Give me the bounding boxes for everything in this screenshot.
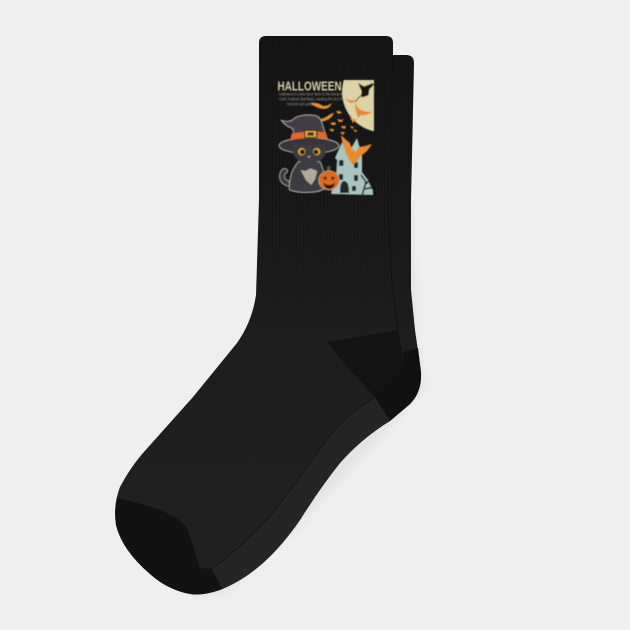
heel outer	[375, 348, 421, 421]
side seam	[388, 200, 398, 330]
back cuff edge	[392, 55, 394, 72]
haunted house	[331, 138, 375, 196]
cat head	[293, 142, 326, 164]
description text	[279, 92, 343, 106]
sole band	[212, 397, 390, 589]
sock body	[115, 36, 421, 594]
sock shadow	[190, 200, 424, 598]
icon: flying witch	[355, 83, 374, 102]
description text: Celtic Festival (Samhain), marking the end of	[279, 96, 343, 102]
ribbing	[258, 36, 412, 214]
description text: harvest and warding	[287, 102, 317, 106]
cat eyes	[298, 148, 320, 158]
sock	[115, 30, 421, 594]
infographic: Halloween sock product	[115, 36, 422, 594]
windows and door	[339, 160, 358, 193]
pumpkin	[319, 166, 339, 190]
artwork	[277, 79, 375, 196]
title: HALLOWEEN	[278, 78, 342, 94]
witch hat	[279, 115, 339, 154]
cat body	[289, 162, 325, 193]
big orange bat	[341, 135, 372, 165]
description text: Halloween's roots trace back to the ancient	[279, 92, 343, 96]
toe	[115, 498, 222, 594]
orange bats	[310, 98, 372, 135]
moon	[341, 79, 375, 132]
heel patch	[327, 330, 402, 397]
cat tail	[282, 171, 291, 184]
chest fur	[301, 168, 317, 185]
dead tree	[361, 175, 375, 196]
sole seam	[212, 397, 375, 569]
cat with witch hat	[279, 115, 339, 193]
